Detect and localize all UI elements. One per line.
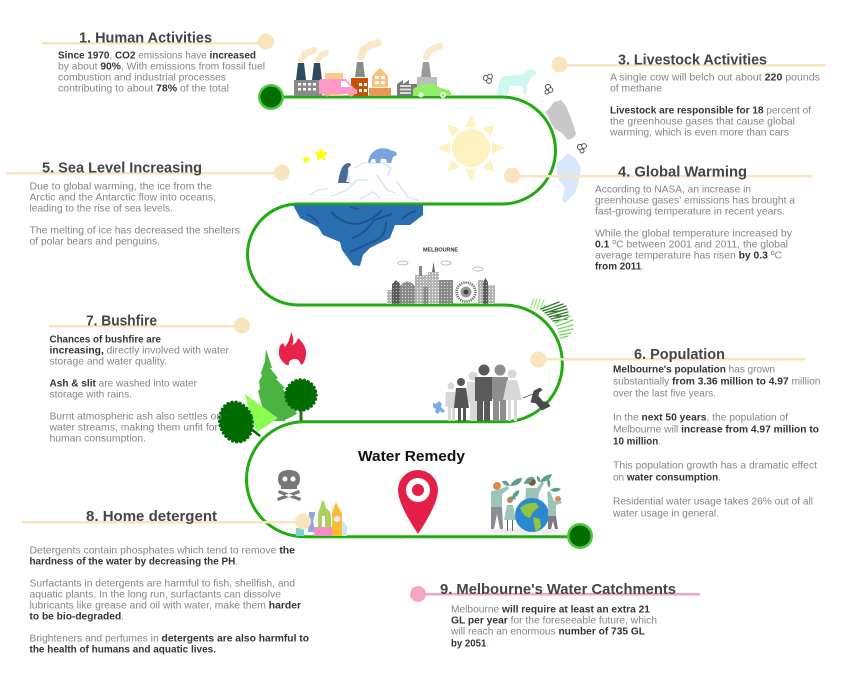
icon: location pin: [398, 470, 438, 534]
icon: palm leaves: [531, 299, 573, 338]
text block: 7: human consumption.: [50, 432, 146, 444]
heading: 5: 5. Sea Level Increasing: [42, 160, 202, 176]
text block: 7: Chances of bushfire are: [50, 334, 161, 346]
text block: 9: [450, 604, 657, 650]
text block: 8: Brighteners and perfumes in detergents are also harmful to: [30, 632, 309, 644]
heading: 8: 8. Home detergent: [86, 508, 217, 525]
text block: 6: Melbourne's population has grown: [613, 364, 775, 376]
icon: stars: [302, 148, 328, 163]
text block: 1: by about 90%, With emissions from fossil fuel: [58, 60, 265, 72]
heading: Water Remedy: Water Remedy: [358, 448, 466, 465]
icon: sun: [438, 115, 504, 181]
text block: 6: Residential water usage takes 26% out of all: [613, 496, 813, 508]
text block: 9: by 2051.: [451, 638, 489, 650]
text block: 5: [30, 180, 240, 248]
text block: 3: warming, which is even more than cars: [609, 126, 789, 138]
text block: 8: aquatic plants. In the long run, surfactants can dissolve: [30, 588, 281, 600]
panel: 4 Global Warming: [504, 164, 812, 272]
icon: skull and crossbones: [277, 470, 301, 501]
text block: 6: on water consumption.: [613, 472, 721, 484]
text block: 8: lubricants like grease and oil with water, make them harder: [30, 600, 301, 612]
heading: 9: 9. Melbourne's Water Catchments: [440, 581, 676, 598]
text block: 8: the health of humans and aquatic lives.: [30, 644, 216, 656]
text block: 1: combustion and industrial processes: [58, 72, 226, 84]
text block: 7: Burnt atmospheric ash also settles on: [50, 410, 222, 422]
panel: 1 Human Activities: [42, 30, 274, 94]
icon: trees: [215, 349, 316, 445]
text block: 9: Melbourne will require at least an extra 21: [451, 604, 650, 616]
text block: 7: water streams, making them unfit for: [49, 422, 218, 434]
heading: 1: 1. Human Activities: [79, 30, 212, 46]
text block: 5: of polar bears and penguins.: [30, 236, 160, 248]
panel: 3 Livestock Activities: [552, 52, 826, 138]
heading: 4: 4. Global Warming: [618, 164, 747, 180]
text block: 3: Livestock are responsible for 18 percent of: [610, 104, 811, 116]
text block: 6: 10 million.: [613, 436, 661, 448]
text block: 7: storage and water quality.: [50, 356, 167, 368]
panel: 6 Population: [530, 346, 821, 520]
text block: 8: [30, 544, 309, 656]
text block: 8: hardness of the water by decreasing the PH.: [30, 556, 238, 568]
text block: 5: The melting of ice has decreased the shelters: [30, 224, 240, 236]
text block: 4: [595, 184, 795, 272]
text block: 7: increasing, directly involved with water: [50, 344, 229, 356]
text block: 4: greenhouse gases' emissions has brought a: [595, 194, 795, 206]
path: green winding road: [246, 97, 580, 537]
text block: 3: of methane: [610, 82, 662, 94]
icon: Melbourne skyline: [387, 248, 495, 304]
icon: end dot: [567, 523, 593, 549]
icon: factories and vehicles: [294, 43, 451, 98]
text block: 4: While the global temperature increased by: [595, 228, 793, 240]
text block: 7: Ash & slit are washed into water: [50, 378, 197, 390]
heading: 3: 3. Livestock Activities: [618, 52, 767, 68]
text block: 5: Due to global warming, the ice from the: [30, 180, 212, 192]
icon: livestock: [483, 69, 586, 153]
text block: 8: Surfactants in detergents are harmful to fish, shellfish, and: [30, 578, 295, 590]
text block: 7: storage with rains.: [50, 388, 132, 400]
text block: 4: 0.1 ºC between 2001 and 2011, the global: [595, 238, 788, 250]
text block: 4: average temperature has risen by 0.3 ºC: [595, 250, 782, 262]
panel: 9 Melbourne's Water Catchments: [410, 581, 700, 650]
text block: 8: to be bio-degraded.: [30, 610, 124, 622]
text block: 4: According to NASA, an increase in: [595, 184, 751, 196]
icon: iceberg under water: [293, 205, 423, 266]
text block: 6: substantially from 3.36 million to 4.97 million: [613, 376, 821, 388]
icon: flame: [279, 332, 306, 365]
icon: start dot: [258, 84, 284, 110]
text block: 6: In the next 50 years, the population of: [613, 412, 788, 424]
panel: 8 Home detergent: [22, 508, 311, 656]
icon: iceberg top with polar bear and penguin: [310, 148, 417, 200]
text block: 7: [49, 334, 229, 444]
text block: 6: [612, 364, 821, 520]
text block: 6: Melbourne will increase from 4.97 million to: [613, 424, 819, 436]
text block: 5: Arctic and the Antarctic flow into oceans,: [30, 192, 216, 204]
text block: 3: A single cow will belch out about 220 pounds: [610, 72, 820, 84]
text block: 3: [609, 72, 820, 138]
text block: 4: fast-growing temperature in recent years.: [595, 206, 785, 218]
icon: blue cow behind path: [557, 153, 581, 203]
heading: 6: 6. Population: [634, 346, 725, 363]
text block: 8: Detergents contain phosphates which tend to remove the: [30, 544, 295, 556]
text block: 1: [58, 50, 265, 94]
text block: 9: GL per year for the foreseeable future, which: [451, 614, 657, 626]
text block: 6: over the last five years.: [613, 388, 716, 400]
text block: 3: the greenhouse gases that cause global: [610, 116, 795, 128]
heading: 7: 7. Bushfire: [86, 312, 157, 330]
text block: 6: This population growth has a dramatic effect: [613, 460, 817, 472]
panel: 5 Sea Level Increasing: [6, 160, 290, 248]
text block: 5: leading to the rise of sea levels.: [30, 202, 173, 214]
panel: 7 Bushfire: [49, 312, 250, 444]
text block: 1: Since 1970, CO2 emissions have increased: [58, 50, 256, 62]
text block: 6: water usage in general.: [612, 508, 719, 520]
icon: Melbourne skyline: MELBOURNE: [423, 248, 459, 254]
text block: 9: will reach an enormous number of 735 GL: [450, 626, 646, 638]
text block: 1: contributing to about 78% of the total: [58, 82, 229, 94]
text block: 4: from 2011.: [595, 260, 644, 272]
icon: people with globe: [489, 474, 562, 534]
icon: family: [433, 364, 550, 421]
icon: detergent bottles: [296, 501, 347, 536]
